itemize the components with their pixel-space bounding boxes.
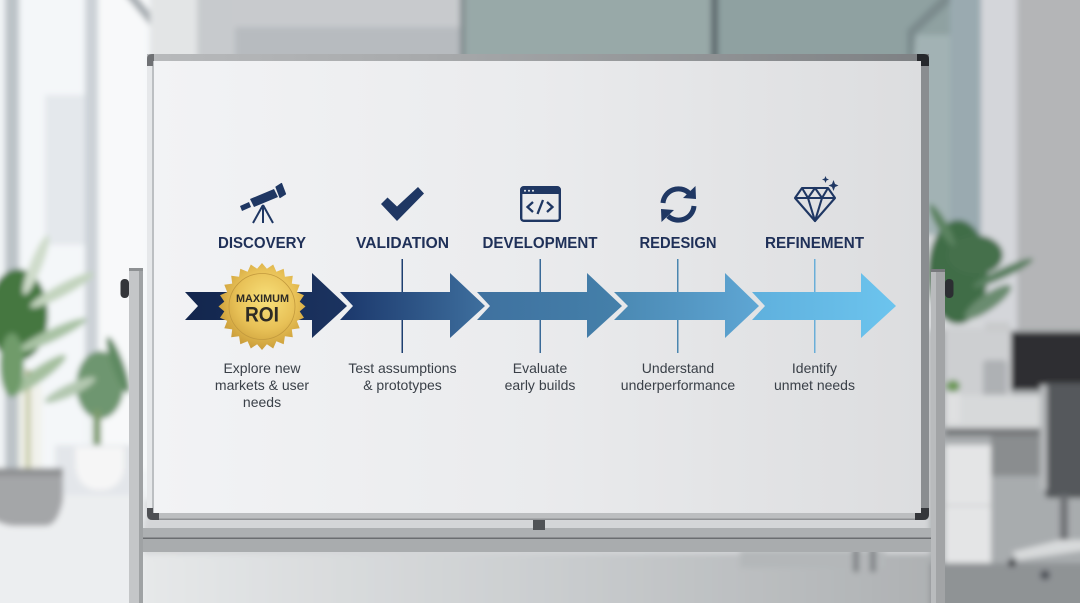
step 2: validation [348, 187, 457, 393]
description: & prototypes [363, 377, 442, 393]
right plant [926, 202, 1035, 332]
arrow 4 [614, 273, 759, 338]
description: markets & user [215, 377, 309, 393]
tray clip [533, 520, 545, 530]
centre floor [143, 552, 933, 603]
board surface [154, 61, 921, 513]
right post [931, 269, 945, 603]
step 5: refinement [765, 176, 865, 393]
arrow 5 [752, 273, 896, 338]
step 4: redesign [621, 186, 735, 393]
lower crossbars [139, 528, 935, 552]
description: Test assumptions [348, 360, 457, 376]
left post [129, 268, 143, 603]
right knob [945, 279, 954, 298]
description: Identify [792, 360, 837, 376]
heading: REDESIGN [640, 235, 716, 252]
left plant [0, 233, 134, 470]
pots and left floor [0, 490, 145, 603]
step 1: discovery [215, 184, 309, 410]
heading: DISCOVERY [218, 235, 307, 252]
connector lines [402, 259, 816, 353]
heading: VALIDATION [356, 235, 449, 252]
icon: diamond with sparkles [795, 176, 838, 221]
arrow 2 [340, 273, 485, 338]
arrow 1 [185, 273, 347, 338]
description: Evaluate [513, 360, 567, 376]
icon: refresh arrows [661, 186, 696, 222]
description: underperformance [621, 377, 735, 393]
board frame [147, 54, 929, 520]
badge value: ROI [245, 304, 279, 326]
description: Explore new [223, 360, 301, 376]
heading: REFINEMENT [765, 235, 865, 252]
whiteboard stand [120, 268, 954, 603]
description: needs [243, 394, 281, 410]
icon: check mark [381, 187, 424, 221]
process timeline [185, 259, 896, 353]
badge text: MAXIMUM [236, 293, 289, 305]
description: Understand [642, 360, 714, 376]
left knob [120, 279, 129, 298]
description: early builds [505, 377, 575, 393]
right office [930, 328, 1080, 603]
step 3: development [482, 187, 598, 393]
icon: telescope [240, 184, 286, 223]
icon: code window [521, 187, 560, 221]
whiteboard [147, 54, 929, 530]
badge: maximum ROI [218, 263, 306, 350]
arrow 3 [477, 273, 622, 338]
description: unmet needs [774, 377, 855, 393]
gold seal [218, 263, 306, 350]
heading: DEVELOPMENT [482, 235, 598, 252]
